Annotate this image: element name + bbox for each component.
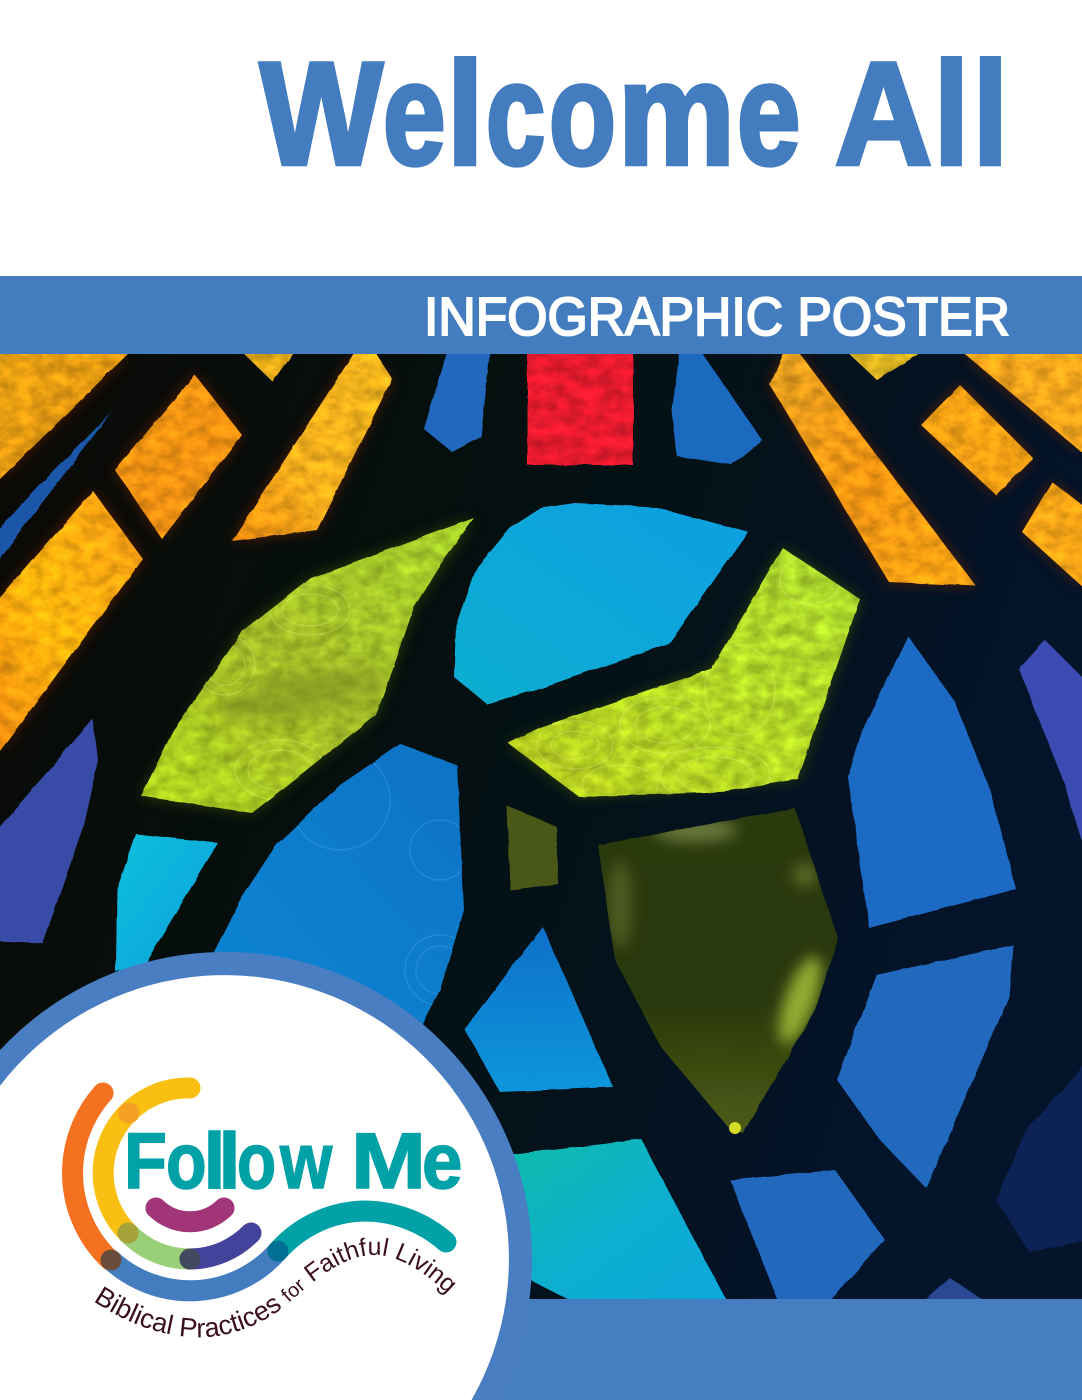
logo wordmark: o: [237, 1116, 276, 1205]
logo tagline: Biblical Practices for Faithful Living: [94, 1238, 456, 1338]
logo: indigo arc: [190, 1233, 251, 1259]
glass: top yellow shard: [849, 354, 918, 380]
header band: [0, 276, 1082, 354]
glass: top right orange: [960, 350, 1082, 455]
glass: yellow-orange slat: [232, 350, 392, 541]
title: A: [835, 32, 932, 195]
stained glass photo: [0, 350, 1082, 1303]
title: l: [934, 32, 969, 195]
title: W: [260, 32, 383, 195]
logo wordmark: l: [218, 1116, 240, 1205]
logo wordmark: [124, 1116, 462, 1205]
glass: top blue: [424, 350, 490, 452]
logo: orange arc: [73, 1093, 110, 1260]
logo badge white disc: [0, 975, 509, 1400]
glass: lower teal: [505, 1139, 728, 1303]
logo wordmark: e: [422, 1116, 462, 1205]
title: e: [737, 32, 800, 195]
glass: large olive: [598, 808, 838, 1133]
glass: small orange rectangle: [921, 385, 1033, 495]
glass: dark navy shard: [996, 1064, 1082, 1253]
title: [258, 32, 1008, 195]
glass: large left amber: [0, 491, 143, 755]
glass: light cyan: [116, 834, 218, 972]
glass: top blue right: [672, 350, 762, 465]
warm and lime glass pieces: [0, 350, 1082, 813]
olive glass tip: [729, 1122, 741, 1134]
title: o: [549, 32, 615, 195]
glass: top-left amber: [0, 350, 132, 482]
glass: bottom navy chip: [926, 1278, 982, 1299]
logo wordmark: l: [204, 1116, 225, 1205]
title: l: [447, 32, 483, 195]
logo: arcs and tagline: [62, 1078, 456, 1338]
glass: central cyan: [454, 503, 748, 704]
cool glass pieces: [0, 350, 1082, 1303]
logo: teal wave: [278, 1211, 446, 1251]
logo: green arc: [128, 1233, 190, 1259]
logo: yellow arc: [103, 1088, 190, 1233]
glass: blue sliver: [0, 412, 112, 563]
logo wordmark: F: [124, 1116, 167, 1205]
glass: small olive: [507, 806, 558, 890]
glass: lime right: [508, 548, 860, 797]
title: l: [973, 32, 1008, 195]
glass: blue triangle: [465, 927, 613, 1092]
glass: indigo left: [0, 719, 98, 943]
olive glass highlights: [608, 818, 830, 1048]
title: m: [618, 32, 735, 195]
glass: long orange slat: [770, 350, 976, 586]
logo wordmark: M: [351, 1116, 426, 1205]
glass: top small shard: [244, 354, 294, 382]
logo: overlap dots: [100, 1102, 288, 1270]
glass: lime leaf: [141, 518, 474, 813]
logo wordmark: w: [280, 1116, 332, 1205]
glass: red: [527, 350, 633, 465]
glass: large blue: [210, 744, 464, 1030]
glass: right blue lower: [837, 945, 1013, 1188]
logo badge ring: [0, 952, 532, 1400]
glass: right indigo: [1019, 640, 1082, 852]
glass: orange rhomb: [115, 375, 242, 539]
title: c: [486, 32, 545, 195]
logo wordmark: o: [166, 1116, 207, 1205]
glass texture: swirls: [195, 556, 840, 1005]
title: e: [383, 32, 445, 195]
glass: right edge orange: [1022, 482, 1082, 589]
logo: magenta smile: [156, 1208, 224, 1222]
logo: blue arc: [111, 1251, 278, 1291]
bottom band: [0, 1299, 1082, 1400]
subtitle: INFOGRAPHIC POSTER: [424, 287, 1010, 347]
glass: right blue upper: [848, 636, 1016, 928]
glass: lower blue: [730, 1170, 885, 1303]
